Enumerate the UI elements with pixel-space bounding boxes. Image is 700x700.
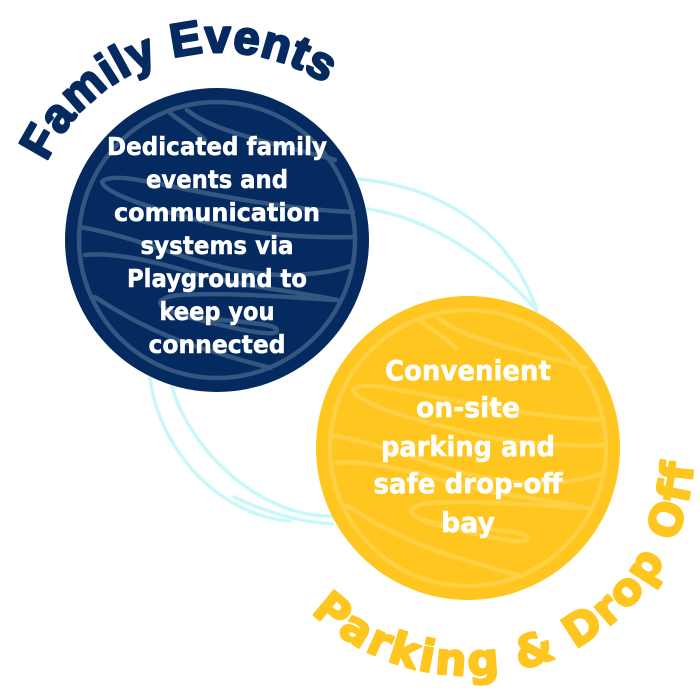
heading: Family Events: Family Events bbox=[18, 20, 334, 160]
family events description: systems via bbox=[140, 231, 294, 260]
parking description: on-site bbox=[416, 391, 520, 424]
heading: Parking & Drop Off: Parking & Drop Off bbox=[312, 459, 694, 686]
parking description bbox=[374, 354, 563, 539]
family events description: communication bbox=[114, 198, 320, 227]
parking description: parking and bbox=[381, 430, 555, 463]
family events description bbox=[107, 132, 327, 359]
parking description: safe drop-off bbox=[374, 467, 563, 500]
panel: family events circle bbox=[65, 88, 369, 392]
panel: parking circle bbox=[316, 296, 620, 600]
family events description: Dedicated family bbox=[107, 132, 327, 161]
connector: lower arcs bbox=[150, 378, 333, 524]
family events description: connected bbox=[148, 330, 286, 359]
connector: upper arcs bbox=[357, 179, 537, 311]
parking description: bay bbox=[441, 506, 495, 539]
parking description: Convenient bbox=[385, 354, 551, 387]
family events description: Playground to bbox=[127, 264, 307, 293]
family events description: events and bbox=[146, 165, 288, 194]
family events description: keep you bbox=[160, 297, 274, 326]
